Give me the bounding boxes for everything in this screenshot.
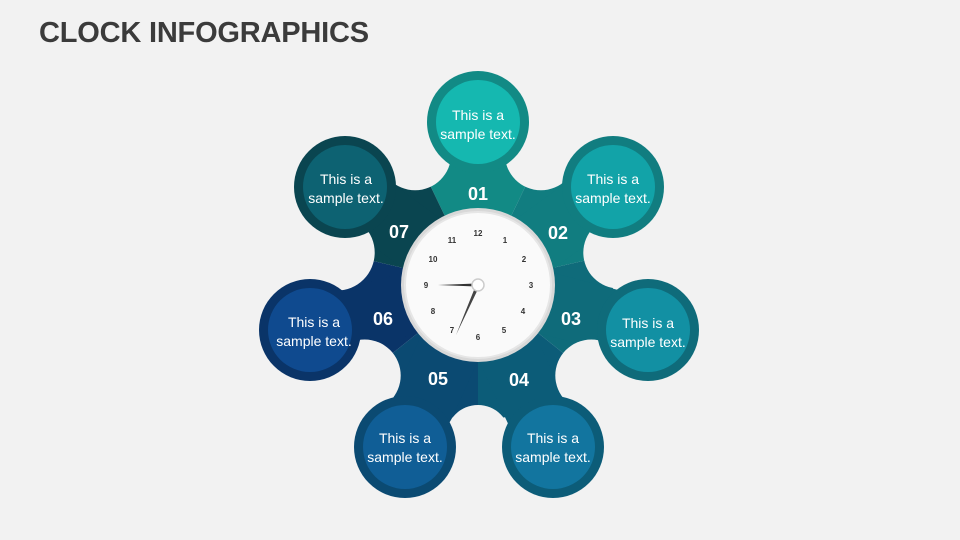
- clock face: 11: [448, 236, 457, 245]
- circle 03: sample text.: [610, 334, 686, 350]
- circle 02: sample text.: [575, 190, 651, 206]
- circle 01: sample text.: [440, 126, 516, 142]
- circle 04: [502, 396, 604, 498]
- clock face: 7: [450, 326, 455, 335]
- circle 03: This is a: [622, 315, 674, 331]
- step numbers: 05: [428, 369, 448, 389]
- circle 06: sample text.: [276, 333, 352, 349]
- circle 04: This is a: [527, 430, 579, 446]
- circle 02: This is a: [587, 171, 639, 187]
- clock face: 1: [503, 236, 508, 245]
- clock face: [401, 208, 555, 362]
- circle 04: sample text.: [515, 449, 591, 465]
- circle 06: This is a: [288, 314, 340, 330]
- circle 06: [259, 279, 361, 381]
- circle 01: [427, 71, 529, 173]
- clock face: 12: [474, 229, 483, 238]
- clock face: 2: [522, 255, 527, 264]
- circle 07: sample text.: [308, 190, 384, 206]
- circle 05: [354, 396, 456, 498]
- clock face: 6: [476, 333, 481, 342]
- circle 05: sample text.: [367, 449, 443, 465]
- step numbers: [373, 184, 581, 390]
- clock face: 8: [431, 307, 436, 316]
- clock face: 10: [429, 255, 438, 264]
- step numbers: 04: [509, 370, 529, 390]
- blob wedges and necks: [299, 118, 655, 469]
- step numbers: 07: [389, 222, 409, 242]
- clock face: 5: [502, 326, 507, 335]
- clock face: 4: [521, 307, 526, 316]
- clock face: 9: [424, 281, 429, 290]
- circle 05: This is a: [379, 430, 431, 446]
- step numbers: 03: [561, 309, 581, 329]
- clock face: 3: [529, 281, 534, 290]
- circle 03: [597, 279, 699, 381]
- title: CLOCK INFOGRAPHICS: [39, 17, 369, 49]
- circle 07: [294, 136, 396, 238]
- circle 02: [562, 136, 664, 238]
- step numbers: 02: [548, 223, 568, 243]
- step numbers: 01: [468, 184, 488, 204]
- circle 07: This is a: [320, 171, 372, 187]
- clock hands: [438, 284, 476, 286]
- step numbers: 06: [373, 309, 393, 329]
- circle 01: This is a: [452, 107, 504, 123]
